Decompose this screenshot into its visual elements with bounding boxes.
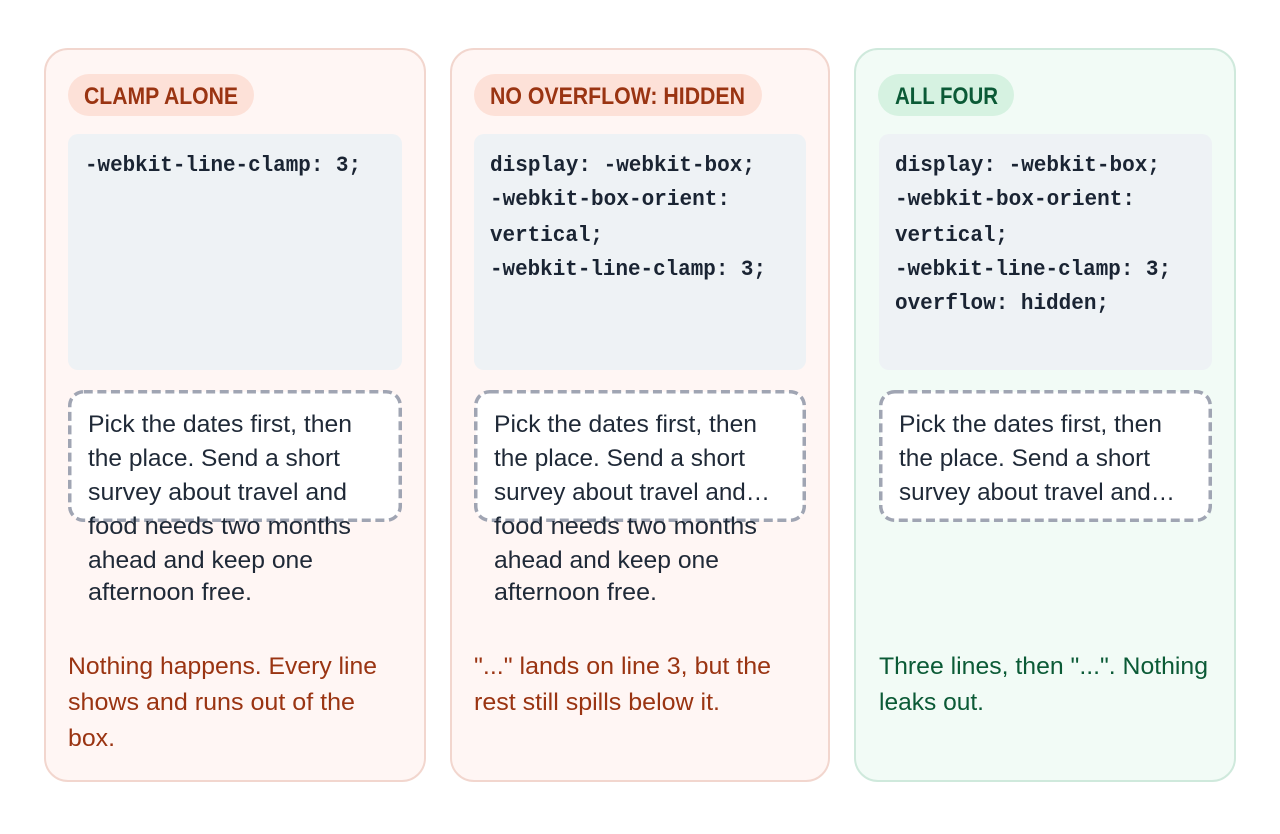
result note: Nothing happens. Every line [68, 653, 377, 680]
code block: display: -webkit-box; [490, 153, 755, 178]
result note [879, 653, 1208, 716]
code block [68, 134, 402, 370]
result note: shows and runs out of the [68, 689, 355, 716]
sample text: Pick the dates first, then [88, 411, 352, 438]
sample text: ahead and keep one [88, 547, 313, 574]
result note: box. [68, 725, 115, 752]
code block: overflow: hidden; [895, 291, 1109, 316]
result note: leaks out. [879, 689, 984, 716]
dashed clamp box [476, 392, 804, 520]
sample text: survey about travel and… [899, 479, 1175, 506]
code block: display: -webkit-box; [895, 153, 1160, 178]
sample text: food needs two months [88, 513, 351, 540]
sample text: afternoon free. [88, 579, 252, 606]
result note [68, 653, 377, 752]
sample text: the place. Send a short [494, 445, 745, 472]
sample text: afternoon free. [494, 579, 657, 606]
sample text: Pick the dates first, then [494, 411, 757, 438]
badge: all four [878, 74, 1014, 116]
code block: -webkit-box-orient: [490, 187, 730, 212]
code block: -webkit-line-clamp: 3; [895, 257, 1171, 282]
sample text: the place. Send a short [88, 445, 340, 472]
sample text [494, 411, 770, 606]
badge: no overflow hidden [474, 74, 762, 116]
result note: Three lines, then "...". Nothing [879, 653, 1208, 680]
dashed clamp box [70, 392, 400, 520]
badge: all four: ALL FOUR [895, 83, 998, 110]
code block: -webkit-box-orient: [895, 187, 1135, 212]
sample text [88, 411, 352, 606]
card background [855, 49, 1235, 781]
panel: all four [855, 49, 1235, 781]
sample text: survey about travel and [88, 479, 347, 506]
code block: vertical; [895, 223, 1008, 248]
panel: no overflow hidden [451, 49, 829, 781]
sample text [899, 411, 1175, 506]
sample text: Pick the dates first, then [899, 411, 1162, 438]
card background [45, 49, 425, 781]
sample text: food needs two months [494, 513, 757, 540]
sample text: survey about travel and… [494, 479, 770, 506]
result note: rest still spills below it. [474, 689, 720, 716]
code block: -webkit-line-clamp: 3; [490, 257, 766, 282]
code block: -webkit-line-clamp: 3; [85, 153, 361, 178]
badge: clamp alone: CLAMP ALONE [84, 83, 238, 110]
card background [451, 49, 829, 781]
code block: vertical; [490, 223, 603, 248]
code block [474, 134, 806, 370]
badge: no overflow hidden: NO OVERFLOW: HIDDEN [490, 83, 745, 110]
result note [474, 653, 771, 716]
panel: clamp alone [45, 49, 425, 781]
sample text: ahead and keep one [494, 547, 719, 574]
result note: "..." lands on line 3, but the [474, 653, 771, 680]
dashed clamp box [881, 392, 1210, 520]
code block [879, 134, 1212, 370]
sample text: the place. Send a short [899, 445, 1150, 472]
badge: clamp alone [68, 74, 254, 116]
